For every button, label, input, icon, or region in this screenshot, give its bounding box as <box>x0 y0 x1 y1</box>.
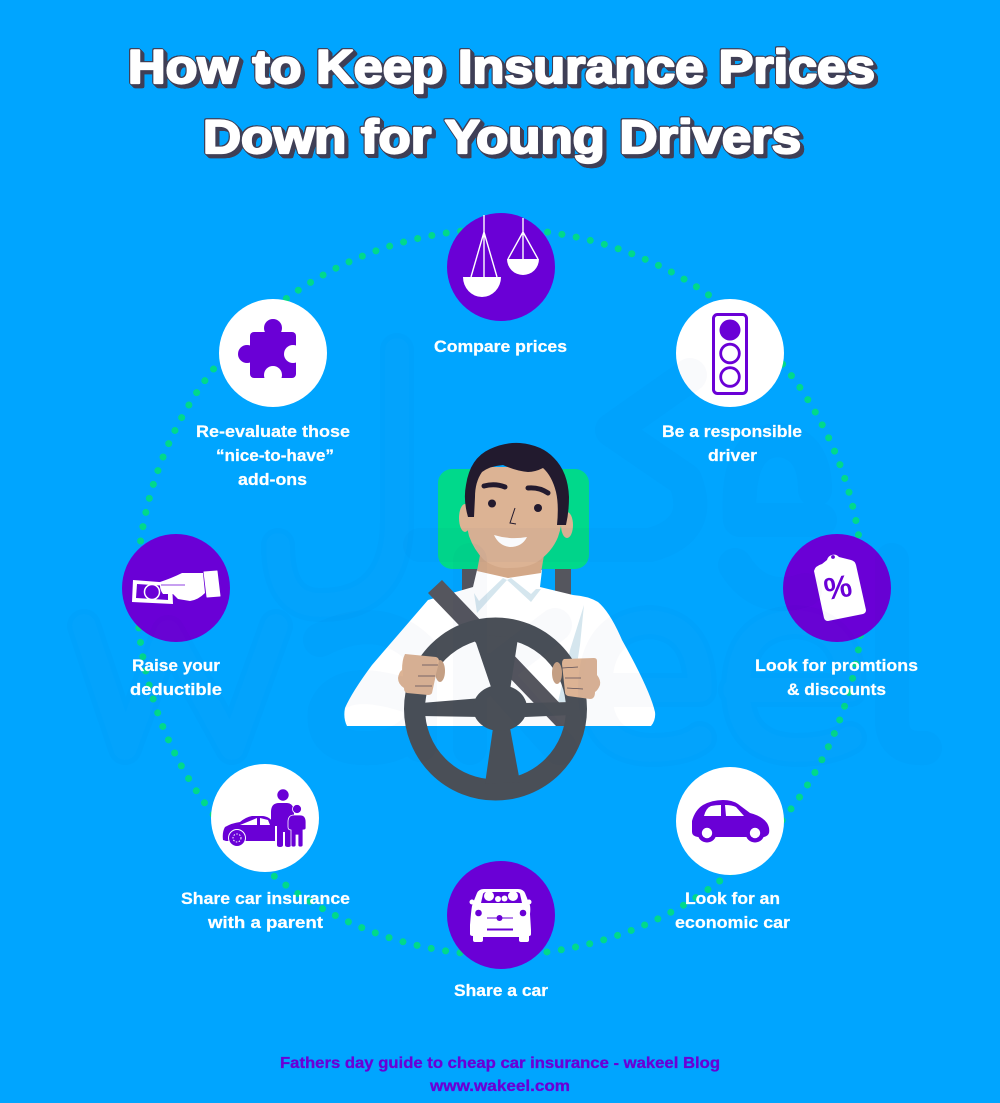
label: raise your deductible: deductible <box>130 680 222 699</box>
icon: discount tag on purple circle <box>783 534 891 642</box>
label: re-evaluate add-ons: “nice-to-have” <box>216 446 334 465</box>
icon: traffic light on white circle <box>676 299 784 407</box>
label: look for an economic car: economic car <box>675 913 790 932</box>
driver illustration <box>344 443 655 790</box>
icon: hand with banknote on purple circle <box>122 534 230 642</box>
watermark: wakeel logo <box>84 350 925 750</box>
icon: shared car with passengers on purple circle <box>447 861 555 969</box>
dotted green ring <box>137 229 863 955</box>
label: share a car: Share a car <box>454 981 548 1000</box>
label: re-evaluate add-ons: Re-evaluate those <box>196 422 350 441</box>
icon: parent, child and car on white circle <box>211 764 319 872</box>
label: share car insurance with a parent: with a parent <box>207 913 323 932</box>
label: raise your deductible <box>130 656 222 699</box>
label: be a responsible driver: driver <box>708 446 757 465</box>
icon: puzzle piece on white circle <box>219 299 327 407</box>
icon: small car on white circle <box>676 767 784 875</box>
collar and sleeve shading <box>474 578 584 702</box>
label: be a responsible driver: Be a responsible <box>662 422 802 441</box>
head <box>459 443 573 568</box>
label: re-evaluate add-ons: add-ons <box>238 470 307 489</box>
footer source: www.wakeel.com <box>429 1078 570 1095</box>
seat belt <box>428 580 572 726</box>
footer source: Fathers day guide to cheap car insurance - wakeel Blog <box>280 1055 720 1072</box>
neck <box>477 555 544 578</box>
icon: scales on purple circle <box>447 213 555 321</box>
label: be a responsible driver <box>662 422 802 465</box>
label: look for an economic car: Look for an <box>685 889 780 908</box>
footer source <box>280 1055 720 1095</box>
shirt <box>344 570 655 726</box>
seat headrest <box>438 469 589 597</box>
label: look for an economic car <box>675 889 790 932</box>
right hand <box>552 658 600 699</box>
icon: discount tag on purple circle: % <box>821 568 855 607</box>
label: share car insurance with a parent <box>181 889 350 932</box>
steering wheel <box>414 628 576 790</box>
title: Down for Young Drivers <box>203 110 801 163</box>
label: look for promotions and discounts <box>755 656 918 699</box>
label: raise your deductible: Raise your <box>132 656 220 675</box>
label: look for promotions and discounts: Look for promtions <box>755 656 918 675</box>
label: look for promotions and discounts: & discounts <box>787 680 886 699</box>
left hand <box>398 654 445 695</box>
title <box>128 40 875 163</box>
label: share car insurance with a parent: Share car insurance <box>181 889 350 908</box>
label: re-evaluate add-ons <box>196 422 350 489</box>
label: compare prices: Compare prices <box>434 337 567 356</box>
title: How to Keep Insurance Prices <box>128 40 875 93</box>
